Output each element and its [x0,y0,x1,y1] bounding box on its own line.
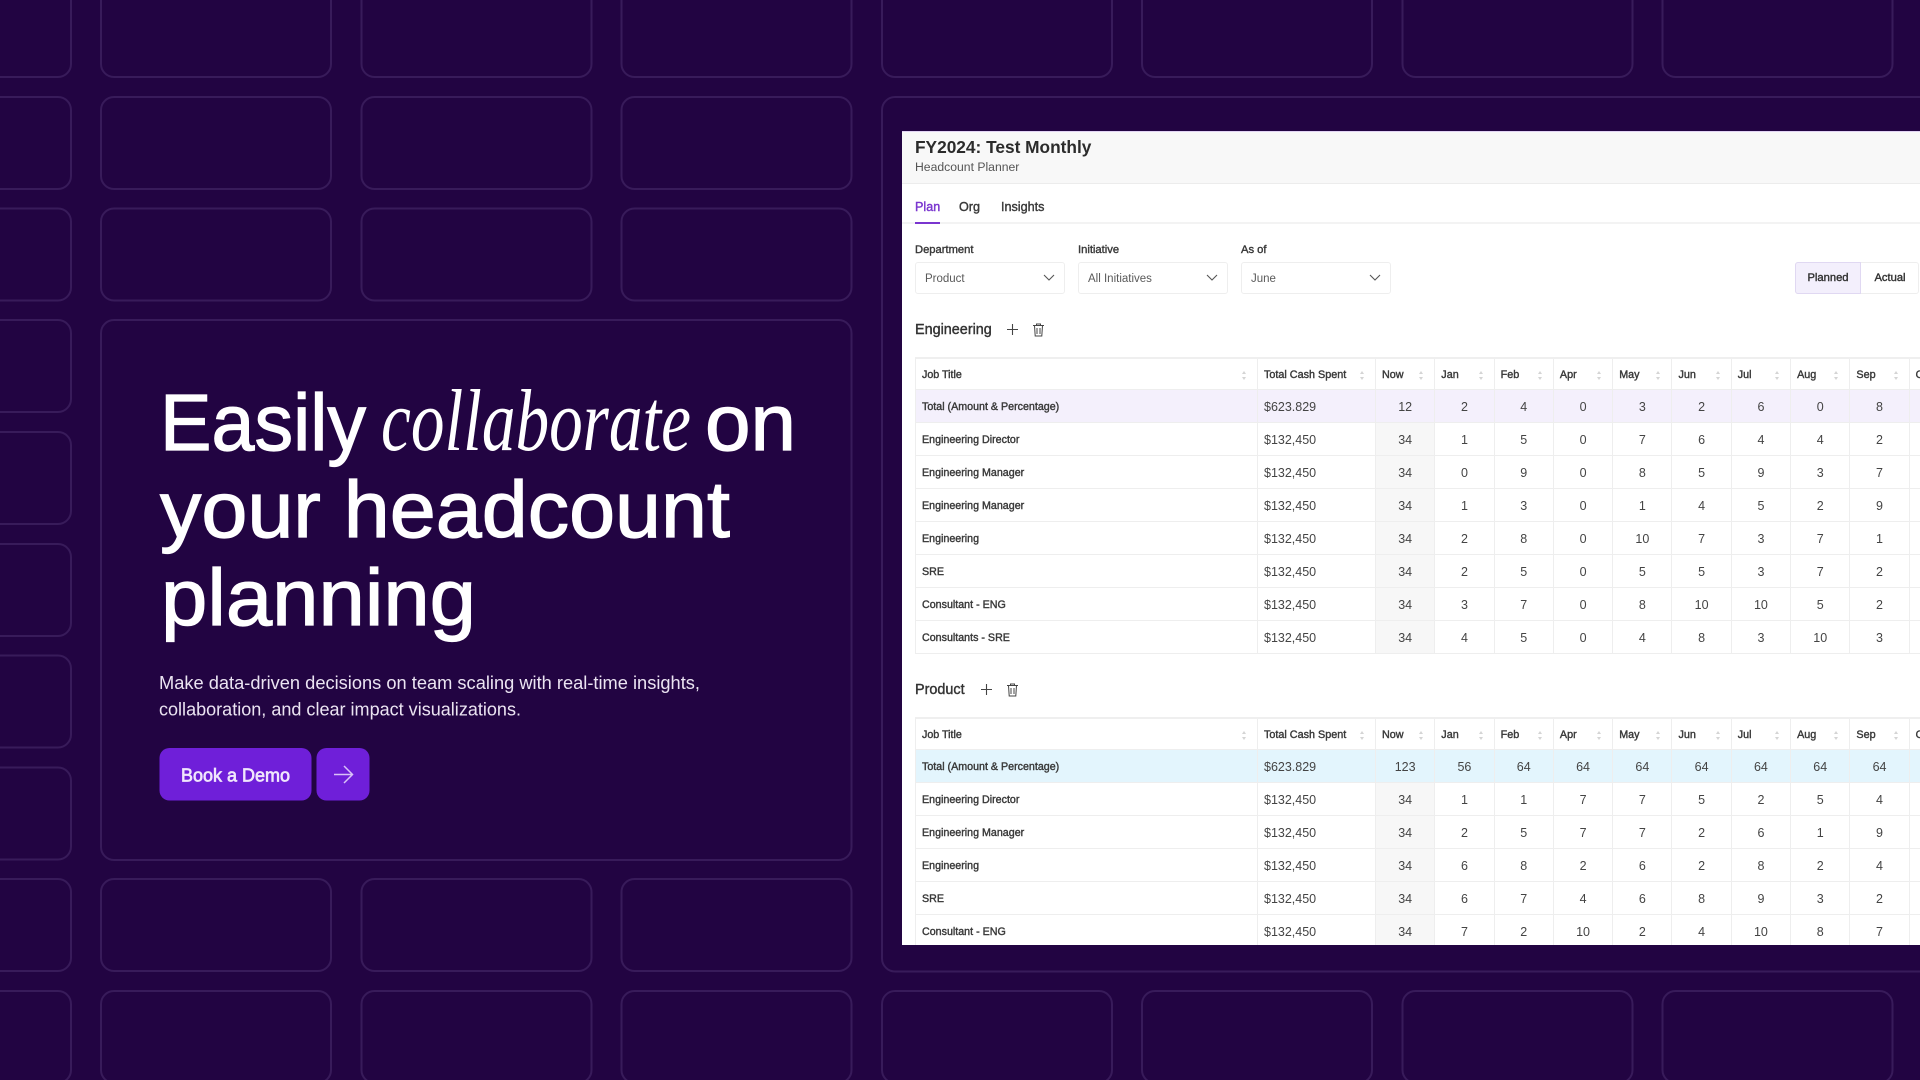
table: Engineering: 3 [1876,631,1883,645]
table: Product: 64 [1576,760,1590,774]
table: Engineering: 34 [1398,565,1412,579]
filter: Initiative: All Initiatives [1088,273,1152,285]
table: Engineering: $132,450 [1264,532,1316,546]
table: Product: 8 [1817,925,1824,939]
table: Engineering: 2 [1817,499,1824,513]
filter: As of: As of [1241,244,1266,256]
headline: your headcount [160,465,730,554]
table: Product: 123 [1395,760,1416,774]
table: Engineering: 2 [1461,565,1468,579]
table: Product: 64 [1517,760,1531,774]
table: Engineering: 0 [1580,433,1587,447]
table: Product: 2 [1461,826,1468,840]
table: Product: Jan [1441,729,1459,741]
section heading: Engineering: Engineering [915,322,992,338]
table: Product: 4 [1580,892,1587,906]
headline: planning [161,553,476,642]
table: Engineering: 10 [1754,598,1768,612]
table: Product: $623.829 [1264,760,1316,774]
table: Engineering: 34 [1398,631,1412,645]
table: Product: 34 [1398,892,1412,906]
table: Product: $132,450 [1264,793,1316,807]
table: Engineering: 12 [1398,400,1412,414]
table: Engineering [915,357,1920,654]
table: Product: 10 [1576,925,1590,939]
button: Book a Demo: Book a Demo [181,764,290,786]
table: Engineering: Consultants - SRE [922,632,1010,644]
table: Product: 2 [1817,859,1824,873]
table: Product: 5 [1698,793,1705,807]
table: Engineering: Consultant - ENG [922,599,1006,611]
table: Engineering: 7 [1817,565,1824,579]
toggle: Planned / Actual [1795,262,1919,294]
table: Engineering: 7 [1698,532,1705,546]
table: Product: 5 [1817,793,1824,807]
tab: Plan: Plan [915,200,940,214]
table: Engineering: 2 [1876,433,1883,447]
subtitle: Headcount Planner [915,160,1019,174]
table: Product: 64 [1873,760,1886,774]
table: Engineering: 2 [1698,400,1705,414]
table: Engineering: 1 [1876,532,1883,546]
table: Engineering: 34 [1398,598,1412,612]
table: Product: 8 [1698,892,1705,906]
table: Engineering: Total (Amount & Percentage) [922,401,1059,413]
table: Engineering: 9 [1876,499,1883,513]
table: Product: 6 [1639,892,1646,906]
table: Engineering: $132,450 [1264,565,1316,579]
table: Product: 56 [1457,760,1471,774]
table: Product: Jun [1678,729,1696,741]
table: Engineering: $132,450 [1264,631,1316,645]
table: Engineering: 0 [1580,400,1587,414]
table: Engineering: Engineering Director [922,434,1019,446]
tab: Insights: Insights [1001,200,1044,214]
table: Product: Engineering Manager [922,827,1024,839]
table: Product: 10 [1754,925,1768,939]
table: Engineering: 1 [1461,499,1468,513]
table: Product: Now [1382,729,1404,741]
table: Engineering: 0 [1817,400,1824,414]
table: Product: 3 [1817,892,1824,906]
table: Engineering: Engineering Manager [922,500,1024,512]
table: Product: 64 [1635,760,1649,774]
headline: Easily [160,378,366,467]
table: Product: 6 [1461,859,1468,873]
filter: Initiative: Initiative [1078,244,1119,256]
filter: As of [1240,244,1391,294]
table: Product: $132,450 [1264,892,1316,906]
table: Product: 64 [1695,760,1709,774]
table: Product: 7 [1461,925,1468,939]
table: Engineering: Apr [1560,369,1577,381]
table: Product: 2 [1639,925,1646,939]
table: Engineering: 3 [1757,532,1764,546]
table: Engineering: 0 [1461,466,1468,480]
toggle: Planned / Actual: Planned [1807,272,1849,284]
title: FY2024: Test Monthly [915,137,1091,157]
table: Engineering: 0 [1580,565,1587,579]
table: Engineering: 10 [1635,532,1649,546]
filter: Initiative [1078,244,1228,294]
table: Engineering: Now [1382,369,1404,381]
filter: Department: Product [925,273,965,285]
table: Engineering: Sep [1856,369,1876,381]
table: Product: Total Cash Spent [1264,729,1346,741]
table: Engineering: $132,450 [1264,598,1316,612]
table: Engineering: 0 [1580,532,1587,546]
table: Engineering: Jul [1738,369,1752,381]
table: Engineering: 8 [1639,598,1646,612]
table: Product: Apr [1560,729,1577,741]
table: Product: 8 [1757,859,1764,873]
table: Product: 34 [1398,859,1412,873]
table: Engineering: Job Title [922,369,962,381]
button: Book a Demo [160,748,312,800]
table: Engineering: 4 [1757,433,1764,447]
table: Product: Engineering [922,860,979,872]
table: Engineering: 4 [1520,400,1527,414]
panel: headcount planner app window [902,131,1920,945]
table: Engineering: 3 [1520,499,1527,513]
headline [160,373,796,642]
table: Product: 7 [1639,793,1646,807]
table: Product: 9 [1757,892,1764,906]
table: Engineering: Engineering Manager [922,467,1024,479]
table: Engineering: Aug [1797,369,1816,381]
table: Product: 6 [1757,826,1764,840]
table: Engineering: 3 [1461,598,1468,612]
button: arrow [316,748,370,800]
table: Product: Aug [1797,729,1816,741]
section heading: Engineering [915,322,1044,338]
filter: Department: Department [915,244,973,256]
table: Engineering: 3 [1639,400,1646,414]
table: Product: 7 [1520,892,1527,906]
table: Engineering: 5 [1520,565,1527,579]
table: Engineering: 0 [1580,466,1587,480]
table: Engineering: 10 [1695,598,1709,612]
table: Product: 34 [1398,925,1412,939]
table: Engineering: May [1619,369,1640,381]
table: Engineering: 5 [1757,499,1764,513]
table: Engineering: 5 [1698,466,1705,480]
table: Product: Feb [1501,729,1519,741]
table: Product: $132,450 [1264,925,1316,939]
filter: Department [915,244,1065,294]
table: Engineering: Jan [1441,369,1459,381]
table: Product: 6 [1461,892,1468,906]
table: Engineering: SRE [922,566,944,578]
table: Engineering: Total Cash Spent [1264,369,1346,381]
table: Product: Jul [1738,729,1752,741]
app header [902,132,1920,184]
table: Engineering: $132,450 [1264,499,1316,513]
table: Product: 64 [1813,760,1827,774]
table: Engineering: 6 [1698,433,1705,447]
table: Engineering: Jun [1678,369,1696,381]
table: Engineering: Engineering [922,533,979,545]
table: Product: 2 [1876,892,1883,906]
table: Engineering: 10 [1813,631,1827,645]
table: Engineering: 4 [1639,631,1646,645]
table: Engineering: 7 [1520,598,1527,612]
table: Engineering: 5 [1817,598,1824,612]
table: Product: 8 [1520,859,1527,873]
table: Engineering: 3 [1817,466,1824,480]
filter: As of: June [1251,273,1276,285]
table: Engineering: 1 [1461,433,1468,447]
table: Product: 7 [1876,925,1883,939]
table: Product: 34 [1398,826,1412,840]
table: Engineering: 4 [1817,433,1824,447]
table: Product: 4 [1698,925,1705,939]
table: Engineering: 5 [1520,433,1527,447]
table: Engineering: 0 [1580,499,1587,513]
table: Engineering: $132,450 [1264,466,1316,480]
table: Engineering: 7 [1817,532,1824,546]
table: Product: Consultant - ENG [922,926,1006,938]
headline: collaborate [381,373,691,470]
table: Engineering: 7 [1639,433,1646,447]
table: Product: 1 [1520,793,1527,807]
table: Product: 6 [1639,859,1646,873]
table: Product: 7 [1580,826,1587,840]
table: Engineering: 1 [1639,499,1646,513]
description paragraph: Make data-driven decisions on team scaling with real-time insights, [159,672,700,693]
table: Engineering: 6 [1757,400,1764,414]
table: Product: 9 [1876,826,1883,840]
table: Product: 2 [1698,826,1705,840]
table: Engineering: 9 [1757,466,1764,480]
table: Product: 1 [1461,793,1468,807]
table: Engineering: 8 [1698,631,1705,645]
table: Product: 4 [1876,793,1883,807]
table: Product: 2 [1580,859,1587,873]
table: Engineering: 8 [1639,466,1646,480]
table: Product [915,717,1920,945]
table: Product: May [1619,729,1640,741]
table: Product: 2 [1757,793,1764,807]
table: Product: Total (Amount & Percentage) [922,761,1059,773]
table: Engineering: 5 [1698,565,1705,579]
hero text and call to action [159,373,796,800]
table: Product: 4 [1876,859,1883,873]
tabs [902,184,1920,224]
table: Product: 2 [1698,859,1705,873]
table: Product: 1 [1817,826,1824,840]
headline: on [705,378,796,467]
table: Engineering: 2 [1461,400,1468,414]
description paragraph: collaboration, and clear impact visualizations. [159,698,521,720]
table: Product: 34 [1398,793,1412,807]
description paragraph [159,672,700,720]
table: Product: 2 [1520,925,1527,939]
table: Product: $132,450 [1264,826,1316,840]
toggle: Planned / Actual: Actual [1874,272,1906,284]
table: Engineering: 5 [1639,565,1646,579]
table: Product: 5 [1520,826,1527,840]
table: Product: Job Title [922,729,962,741]
table: Engineering: 4 [1461,631,1468,645]
table: Engineering: 34 [1398,433,1412,447]
table: Engineering: $623.829 [1264,400,1316,414]
table: Engineering: 8 [1876,400,1883,414]
table: Engineering: 3 [1757,631,1764,645]
table: Product: 64 [1754,760,1768,774]
table: Engineering: 9 [1520,466,1527,480]
table: Product: Engineering Director [922,794,1019,806]
table: Product: SRE [922,893,944,905]
table: Engineering: 2 [1876,565,1883,579]
active tab underline [915,222,940,224]
table: Engineering: 8 [1520,532,1527,546]
table: Engineering: 34 [1398,499,1412,513]
table: Engineering: 0 [1580,598,1587,612]
table: Engineering: 2 [1876,598,1883,612]
table: Engineering: $132,450 [1264,433,1316,447]
section heading: Product: Product [915,682,965,698]
table: Product: $132,450 [1264,859,1316,873]
table: Product: 7 [1580,793,1587,807]
table: Engineering: 34 [1398,466,1412,480]
table: Engineering: 5 [1520,631,1527,645]
table: Engineering: 34 [1398,532,1412,546]
table: Engineering: 4 [1698,499,1705,513]
table: Product: Sep [1856,729,1876,741]
table: Engineering: Feb [1501,369,1519,381]
tab: Org: Org [959,200,980,214]
table: Engineering: 0 [1580,631,1587,645]
table: Product: 7 [1639,826,1646,840]
section heading: Product [915,682,1018,698]
table: Engineering: 2 [1461,532,1468,546]
table: Engineering: 3 [1757,565,1764,579]
table: Engineering: 7 [1876,466,1883,480]
